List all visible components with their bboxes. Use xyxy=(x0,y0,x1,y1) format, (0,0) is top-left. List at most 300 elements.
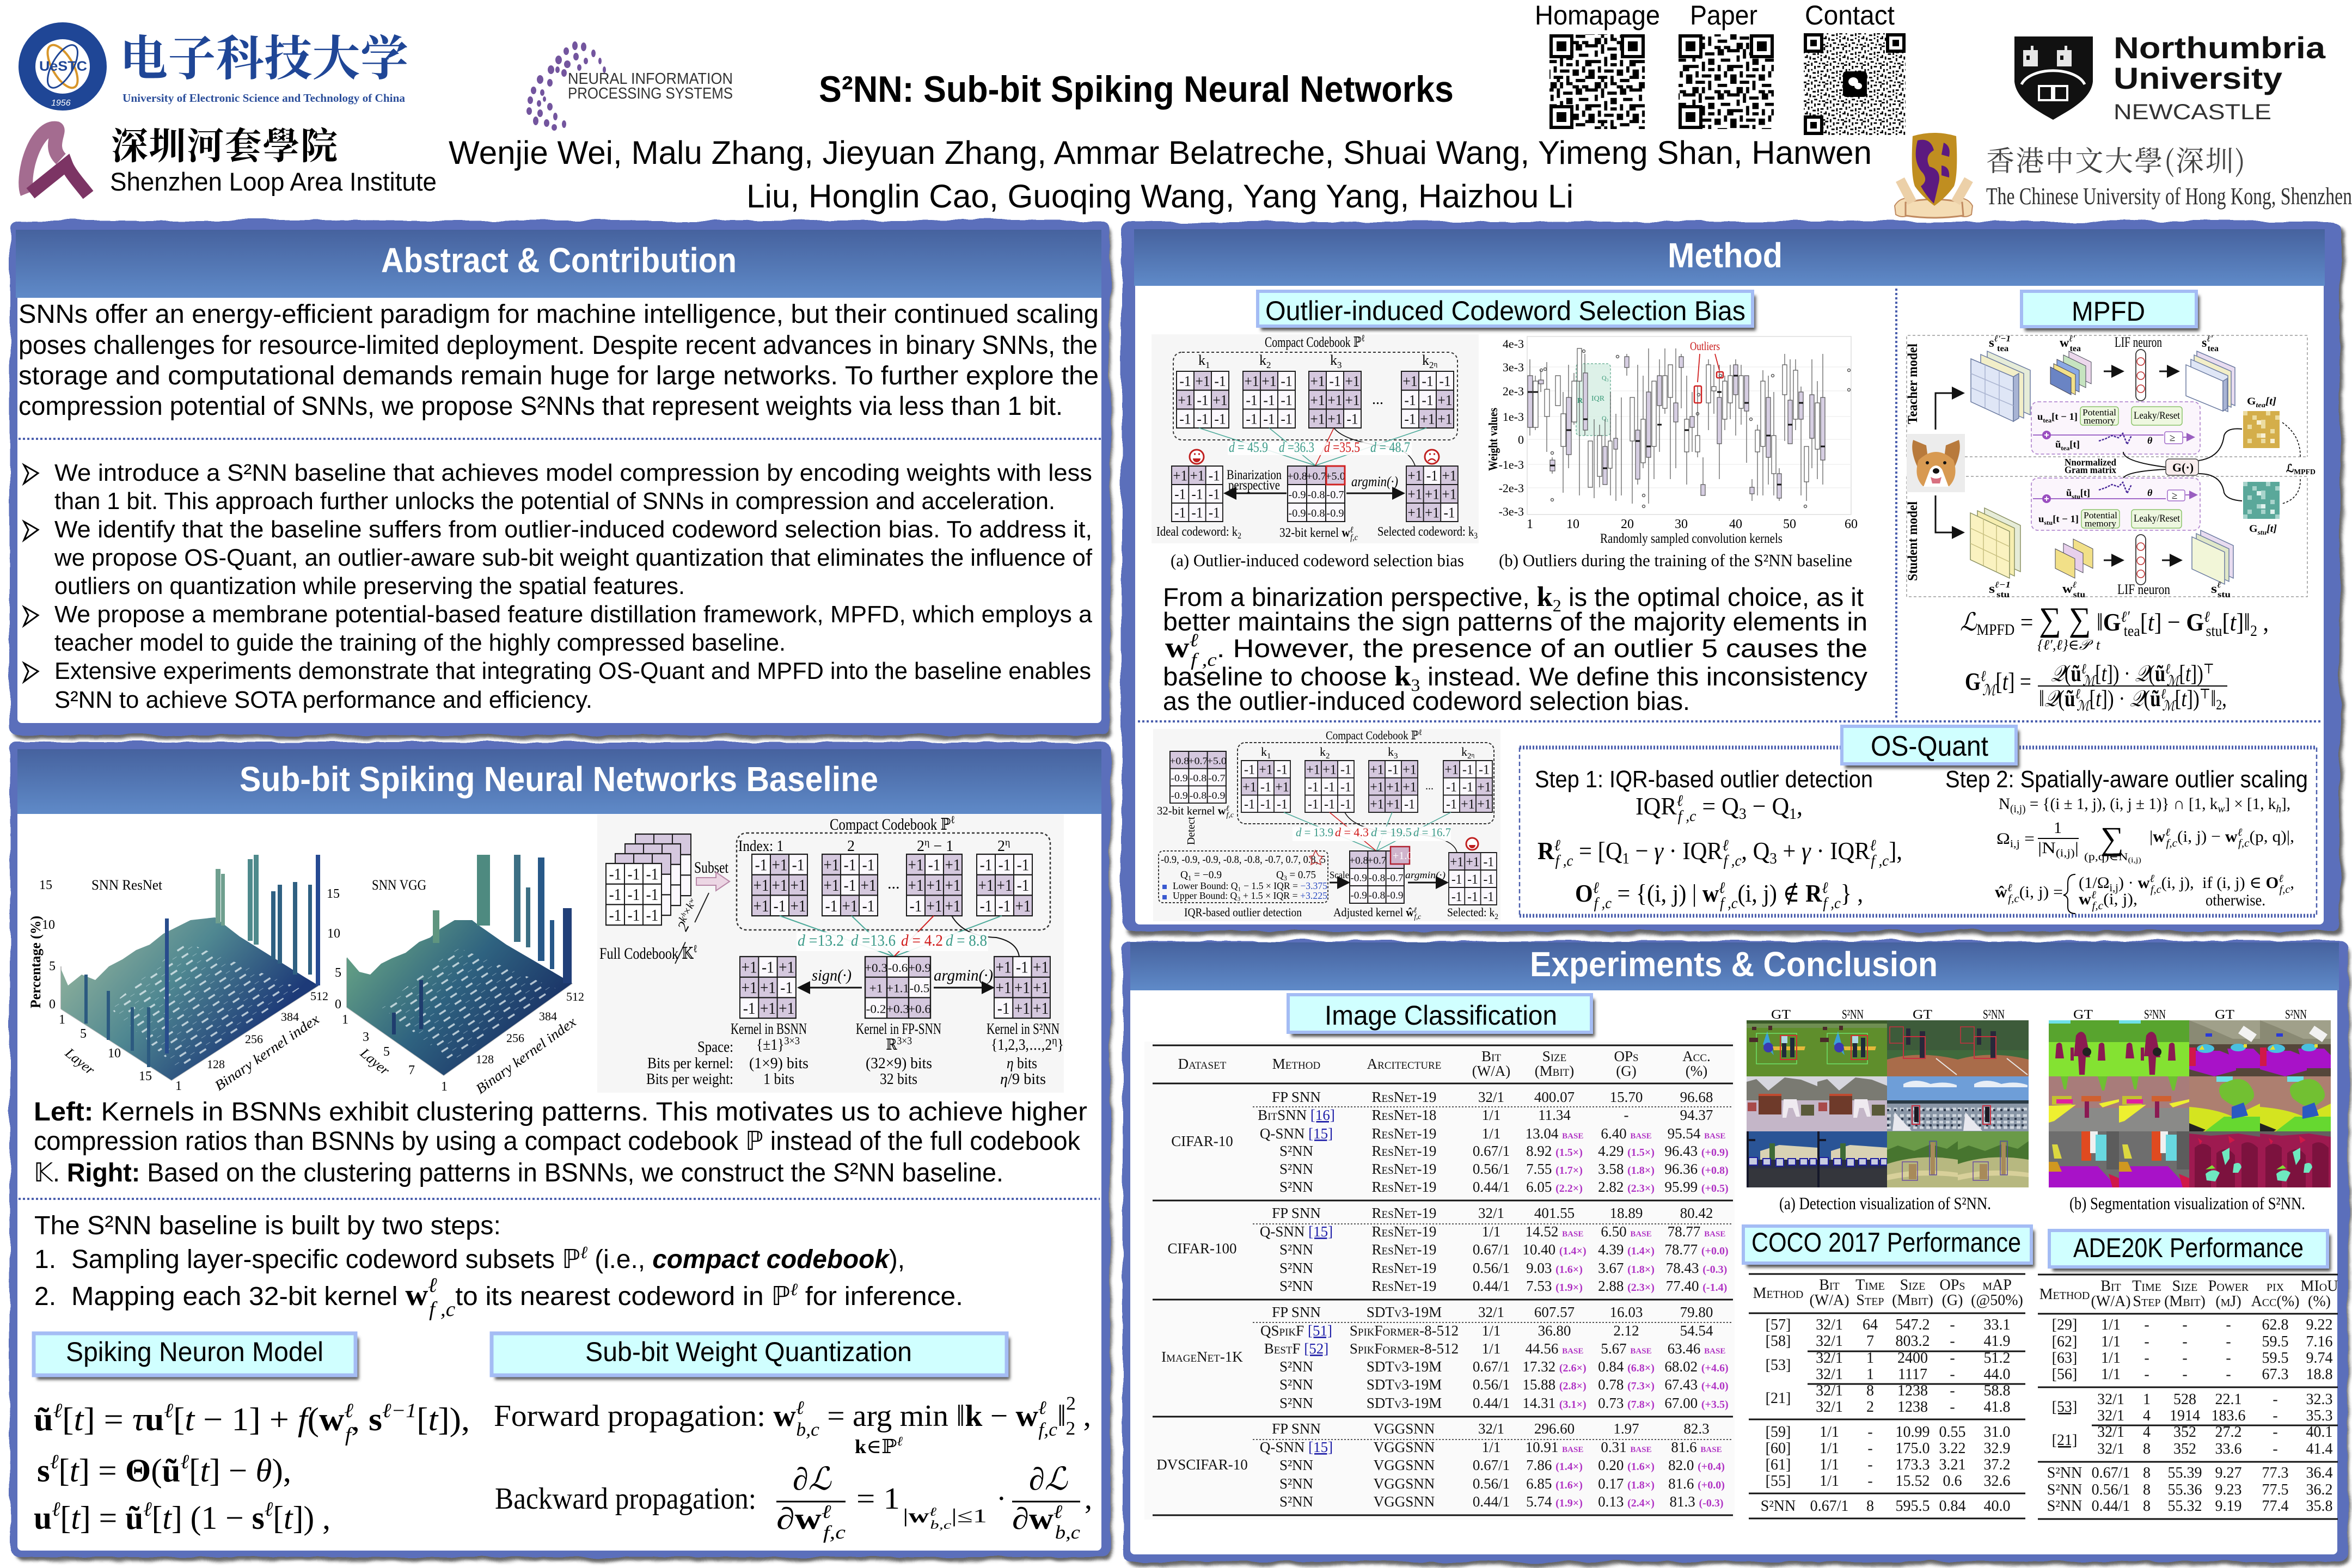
figure: OS-Quant pipeline: -0.9 xyxy=(1208,791,1225,801)
figure a: codeword selection bias: argmin(·) xyxy=(1351,474,1398,489)
QR: paper: Paper xyxy=(1690,0,1757,30)
table: ADE20K: Size xyxy=(2172,1278,2197,1295)
compact codebook box: -1 xyxy=(755,856,767,874)
chart: outliers boxplot: 0 xyxy=(1518,433,1524,446)
figure a: codeword selection bias: k xyxy=(1259,352,1266,368)
figure a: codeword selection bias: +1 xyxy=(1407,468,1422,484)
table: image classification results: 7.53 (1.9×) xyxy=(1526,1278,1583,1294)
figure a: codeword selection bias: d = 45.9 xyxy=(1229,439,1268,455)
QR: paper xyxy=(1679,0,1774,129)
table: ADE20K: Acc(%) xyxy=(2251,1293,2299,1310)
table: ADE20K: 8 xyxy=(2143,1465,2151,1481)
equations: spiking neuron model: [ xyxy=(273,1500,284,1536)
step 2: , xyxy=(2290,874,2294,892)
text block: two steps: ℓ xyxy=(790,1279,798,1299)
icon: happy face xyxy=(1190,450,1204,464)
equations: spiking neuron model: t] = Θ(ũ xyxy=(70,1453,180,1489)
table: COCO 2017: 44.0 xyxy=(1984,1366,2010,1383)
figure: OS-Quant pipeline: -1 xyxy=(1260,797,1271,812)
equations: sub-bit quantization: k∈ℙ xyxy=(855,1436,896,1457)
kernels comparison: {±1} xyxy=(756,1037,787,1054)
table: COCO 2017: 595.5 xyxy=(1896,1498,1930,1515)
table: COCO 2017: 175.0 xyxy=(1896,1440,1930,1457)
text block: contribution bullets: than 1 bit. This approach further unlocks the potential of SNNs in compression and acceleration. xyxy=(54,488,1055,514)
table: COCO 2017: 0.55 xyxy=(1939,1424,1965,1441)
equations: MPFD loss: 2 xyxy=(2250,623,2257,640)
equations: spiking neuron model: u xyxy=(34,1500,52,1536)
chart: outliers boxplot xyxy=(1486,336,1858,546)
chart: SNN ResNet 3D: 5 xyxy=(80,1027,87,1041)
table: COCO 2017: 32.6 xyxy=(1984,1473,2010,1490)
figure a: codeword selection bias: -1 xyxy=(1174,486,1186,503)
compact codebook box: -1 xyxy=(862,897,874,915)
table: image classification results: DVSCIFAR-10 xyxy=(1156,1456,1248,1473)
table: image classification results: ResNet-19 xyxy=(1372,1143,1436,1159)
captions: figures a and b: (a) Outlier-induced codeword selection bias xyxy=(1171,550,1464,570)
equations: spiking neuron model: ℓ xyxy=(50,1451,59,1473)
table: image classification results: ResNet-19 xyxy=(1372,1125,1436,1142)
diagram: MPFD framework: tea xyxy=(2070,344,2081,353)
chart: SNN ResNet 3D: 10 xyxy=(42,918,55,932)
equations: MPFD loss: t]) · 𝒬(ũ xyxy=(2102,661,2167,687)
figure: OS-Quant pipeline: -0.9 xyxy=(1350,890,1367,902)
step 1: f ,c xyxy=(1823,895,1841,912)
table: ADE20K: 32/1 xyxy=(2097,1391,2124,1408)
table: image classification results: ImageNet-1K xyxy=(1161,1349,1243,1365)
kernels comparison: 1 bits xyxy=(763,1071,794,1088)
chart: SNN ResNet 3D: 0 xyxy=(49,997,56,1012)
step 1: , xyxy=(1797,792,1803,820)
figure a: codeword selection bias: k xyxy=(1198,352,1205,368)
figure a: codeword selection bias: Binarization xyxy=(1227,468,1282,482)
table: ADE20K: 0.67/1 xyxy=(2092,1465,2130,1481)
kernels comparison: -1 xyxy=(1016,958,1028,977)
table: ADE20K: 9.22 xyxy=(2306,1316,2332,1333)
chart: SNN ResNet 3D: 128 xyxy=(207,1057,225,1071)
chart: outliers boxplot: -3e-3 xyxy=(1499,505,1524,518)
kernels comparison: ℝ xyxy=(886,1037,898,1054)
compact codebook box: +1 xyxy=(945,897,960,915)
text block: two steps: Sampling layer-specific codeword subsets ℙ xyxy=(71,1245,584,1274)
figure a: codeword selection bias: +1 xyxy=(1425,505,1440,521)
compact codebook box: -1 xyxy=(825,897,837,915)
equations: MPFD loss: ℳ xyxy=(2082,673,2097,689)
figure: OS-Quant pipeline: argmin(·) xyxy=(1405,869,1445,881)
callout: Image Classification: Image Classification xyxy=(1325,1000,1557,1031)
compact codebook box: ... xyxy=(887,874,899,892)
table: ADE20K xyxy=(2038,1275,2338,1519)
table: image classification results: BestF [52] xyxy=(1264,1340,1328,1357)
table: image classification results: 54.54 xyxy=(1680,1322,1713,1339)
equations: sub-bit quantization: f,c xyxy=(1038,1419,1058,1440)
compact codebook box: -1 xyxy=(910,897,922,915)
equations: spiking neuron model: [ xyxy=(152,1500,162,1536)
figure a: codeword selection bias: +1 xyxy=(1173,468,1187,484)
figure: OS-Quant pipeline: f,c xyxy=(1227,811,1234,819)
equations: MPFD loss: MPFD xyxy=(1976,622,2014,639)
diagram: MPFD framework: stu xyxy=(2073,590,2085,599)
table: image classification results: 14.52 BASE xyxy=(1526,1223,1583,1240)
table: image classification results: FP SNN xyxy=(1272,1205,1321,1221)
figure: OS-Quant pipeline: = −0.9 xyxy=(1191,869,1222,881)
kernels comparison: η bits xyxy=(1007,1055,1037,1072)
equations: MPFD loss: ℓ xyxy=(2204,609,2210,626)
student membrane block: Leaky/Reset xyxy=(2134,513,2180,524)
teacher membrane block: Potential xyxy=(2082,407,2116,418)
table: image classification results: 63.46 BASE xyxy=(1668,1340,1725,1357)
table: image classification results: S²NN xyxy=(1279,1475,1313,1492)
table: COCO 2017: [53] xyxy=(1766,1357,1791,1374)
distances: d =13.6 xyxy=(851,932,896,950)
figure a: codeword selection bias: +1 xyxy=(1178,391,1193,408)
callout: OS-Quant xyxy=(1842,726,2019,768)
table: COCO 2017: mAP xyxy=(1982,1277,2012,1294)
chart: SNN VGG 3D: 5 xyxy=(335,966,341,980)
teacher membrane block: [t] xyxy=(2069,439,2080,450)
table: image classification results: 95.99 (+0.5) xyxy=(1664,1179,1729,1195)
chart: SNN VGG 3D: 10 xyxy=(327,927,340,941)
table: ADE20K: 55.32 xyxy=(2168,1498,2202,1515)
table: image classification results: Q-SNN [15] xyxy=(1260,1223,1333,1240)
text block: contribution bullets: we propose OS-Quant, an outlier-aware sub-bit weight quantization that eliminates the influence of xyxy=(54,544,1093,571)
equations: MPFD loss: ℓ xyxy=(1981,668,1986,685)
table: COCO 2017: 3.21 xyxy=(1939,1456,1965,1473)
teacher membrane block: memory xyxy=(2084,415,2116,426)
compact codebook box: +1 xyxy=(791,877,806,895)
table: COCO 2017: Step xyxy=(1856,1292,1884,1309)
teacher membrane block xyxy=(2031,402,2200,454)
figure: OS-Quant pipeline: -1 xyxy=(1467,872,1478,887)
table: COCO 2017: 32/1 xyxy=(1816,1366,1843,1383)
table: COCO 2017: 40.0 xyxy=(1984,1498,2010,1515)
logo: Northumbria University: University xyxy=(2114,61,2282,95)
diagram: MPFD framework: s xyxy=(1989,582,1994,596)
equations: MPFD loss: 𝒬(ũ xyxy=(2051,661,2084,687)
table: ADE20K: S²NN xyxy=(2047,1481,2082,1498)
full codebook stack: -1 xyxy=(646,865,658,884)
table: COCO 2017: 0.6 xyxy=(1943,1473,1962,1490)
figure: OS-Quant pipeline: +1 xyxy=(1259,762,1273,777)
table: ADE20K: 59.5 xyxy=(2262,1350,2289,1367)
figure: OS-Quant pipeline: +1 xyxy=(1477,780,1491,795)
figure: OS-Quant pipeline: +1 xyxy=(1242,780,1257,795)
diagram: MPFD framework: LIF neuron xyxy=(2115,334,2162,350)
table: COCO 2017: 32/1 xyxy=(1816,1316,1843,1333)
table: image classification results: 77.40 (-1.4) xyxy=(1666,1278,1727,1294)
logo: CUHK Shenzhen: 香港中文大學(深圳) xyxy=(1986,138,2245,179)
table: ADE20K: 77.4 xyxy=(2262,1498,2289,1515)
equations: sub-bit quantization: 2 xyxy=(1065,1418,1075,1439)
figure: OS-Quant pipeline: +5.0 xyxy=(1207,756,1227,767)
logo: NeurIPS xyxy=(526,41,733,131)
step 1: } , xyxy=(1841,879,1863,907)
table: image classification results: 7.55 (1.7×) xyxy=(1526,1161,1583,1177)
compact codebook box: +1 xyxy=(1015,897,1031,915)
table: ADE20K: 4 xyxy=(2143,1407,2151,1424)
chart: outliers boxplot: -1e-3 xyxy=(1499,458,1524,471)
table: image classification results: 5.74 (1.9×) xyxy=(1526,1493,1583,1510)
diagram: MPFD framework: tea xyxy=(2208,344,2219,353)
equations: MPFD loss: [ xyxy=(1995,667,2002,695)
chart: SNN VGG 3D: 256 xyxy=(506,1031,524,1045)
chart: SNN ResNet 3D: Percentage (%) xyxy=(28,916,44,1008)
table: COCO 2017: [59] xyxy=(1766,1424,1791,1441)
figure: OS-Quant pipeline: +1 xyxy=(1275,780,1289,795)
table: image classification results: 0.56/1 xyxy=(1473,1475,1510,1492)
equations: MPFD loss: 2 xyxy=(2216,697,2222,713)
table: COCO 2017: 547.2 xyxy=(1896,1316,1930,1333)
step 2: (i, j), xyxy=(2103,890,2137,908)
step 2: | xyxy=(2075,839,2079,857)
figure a: codeword selection bias: +1 xyxy=(1437,411,1453,427)
table: image classification results: Bit xyxy=(1481,1048,1501,1064)
step 2: (i,j) xyxy=(2010,803,2026,815)
equations: sub-bit quantization: 2 xyxy=(1066,1393,1076,1414)
authors xyxy=(449,134,1872,215)
figure: OS-Quant pipeline: 3 xyxy=(1394,752,1398,761)
text block: two steps: 2. xyxy=(34,1282,56,1311)
equations: spiking neuron model: s xyxy=(37,1453,50,1489)
equations: spiking neuron model: ℓ xyxy=(180,1451,189,1473)
compact codebook box: -1 xyxy=(1017,877,1029,895)
figure a: codeword selection bias: -1 xyxy=(1443,505,1455,521)
step 2: ℓ xyxy=(2238,826,2243,838)
table: COCO 2017: Size xyxy=(1900,1277,1925,1294)
step 1: 3 xyxy=(1769,850,1777,867)
text block: contribution bullets: We propose a membrane potential-based feature distillation framework, MPFD, which employs a xyxy=(54,601,1093,628)
table: image classification results: 32/1 xyxy=(1478,1205,1504,1221)
text block: bias explanation: instead. We define this inconsistency xyxy=(1420,662,1868,691)
text block: two steps: The S²NN baseline is built by two steps: xyxy=(34,1211,501,1240)
figure: OS-Quant pipeline: +1 xyxy=(1386,797,1400,812)
chart: SNN ResNet 3D: 10 xyxy=(108,1046,121,1061)
table: ADE20K: - xyxy=(2273,1391,2278,1408)
equations: spiking neuron model: [ xyxy=(60,1500,71,1536)
table: ADE20K: 55.36 xyxy=(2168,1481,2202,1498)
table: ADE20K: - xyxy=(2182,1333,2188,1350)
chart: SNN ResNet 3D: 384 xyxy=(281,1010,299,1024)
figure a: codeword selection bias: -1 xyxy=(1179,411,1191,427)
chart: outliers boxplot: 3e-3 xyxy=(1503,360,1524,374)
table: image classification results: 10.91 BASE xyxy=(1526,1439,1583,1455)
student kernels xyxy=(2055,539,2093,578)
step 1: 1 xyxy=(1622,850,1630,867)
step 2: w xyxy=(2079,890,2091,908)
compact codebook box: +1 xyxy=(945,856,960,874)
figure: OS-Quant pipeline: Q xyxy=(1180,869,1188,881)
teacher membrane block: θ xyxy=(2147,435,2153,446)
table: COCO 2017: 3.22 xyxy=(1939,1440,1965,1457)
table: image classification results: 95.54 BASE xyxy=(1668,1125,1725,1142)
heading: abstract xyxy=(16,230,1101,298)
diagram: MPFD framework: ℓ xyxy=(2216,580,2221,590)
figure: OS-Quant pipeline: -1 xyxy=(1451,889,1462,904)
table: image classification results: 17.32 (2.6×) xyxy=(1522,1358,1587,1375)
figure: OS-Quant pipeline: -1 xyxy=(1483,889,1494,904)
figure a: codeword selection bias: -1 xyxy=(1439,372,1451,389)
table: ADE20K: [56] xyxy=(2052,1366,2077,1383)
chart: SNN VGG 3D: 15 xyxy=(327,887,340,901)
heatmap: student Gram: G xyxy=(2249,523,2257,535)
table: ADE20K: - xyxy=(2182,1316,2188,1333)
table: image classification results: 0.44/1 xyxy=(1473,1179,1510,1195)
text block: bias explanation: w xyxy=(1165,631,1190,664)
step 1: R xyxy=(1805,879,1822,907)
step 2: ℓ xyxy=(2149,873,2155,885)
table: COCO 2017: - xyxy=(1867,1456,1873,1473)
table: image classification results: 4.39 (1.4×) xyxy=(1598,1241,1655,1258)
table: ADE20K: Step xyxy=(2133,1293,2161,1310)
full codebook stack: -1 xyxy=(609,906,621,924)
figure a: codeword selection bias: -1 xyxy=(1209,505,1220,521)
figure: OS-Quant pipeline: +1 xyxy=(1386,780,1400,795)
callout: COCO 2017 Performance: COCO 2017 Performance xyxy=(1751,1227,2021,1258)
equations: spiking neuron model: [ xyxy=(189,1453,200,1489)
step 2: ], xyxy=(2281,795,2290,813)
step 2: |N xyxy=(2038,839,2053,857)
full codebook stack: -1 xyxy=(646,906,658,924)
table: COCO 2017: 33.1 xyxy=(1984,1316,2010,1333)
equations: spiking neuron model: f xyxy=(345,1424,354,1446)
table: image classification results: S²NN xyxy=(1279,1278,1313,1294)
chart: SNN VGG 3D: 384 xyxy=(539,1009,557,1023)
logo: UESTC xyxy=(19,22,408,111)
figure a: codeword selection bias: -1 xyxy=(1214,372,1226,389)
kernels comparison: +0.6 xyxy=(908,1002,931,1015)
kernels comparison: sign(·) xyxy=(812,966,852,984)
figure: OS-Quant pipeline: = 0.75 xyxy=(1287,869,1316,881)
table: image classification results: 8.92 (1.5×) xyxy=(1526,1143,1583,1159)
heatmap: student Gram xyxy=(2243,482,2280,536)
teacher membrane block: ũ xyxy=(2055,439,2061,450)
step 1: + xyxy=(1777,837,1802,865)
table: image classification results: VGGSNN xyxy=(1374,1457,1435,1473)
figure: OS-Quant pipeline: +0.7 xyxy=(1367,855,1386,867)
table: COCO 2017: 2 xyxy=(1866,1399,1874,1416)
figure a: codeword selection bias: +1 xyxy=(1420,411,1435,427)
table: image classification results: ResNet-19 xyxy=(1372,1161,1436,1177)
equations: MPFD loss: ℓ xyxy=(2165,661,2170,677)
step 2: O xyxy=(2266,874,2278,892)
chart: outliers boxplot: 30 xyxy=(1675,517,1688,531)
figure a: codeword selection bias: +0.7 xyxy=(1306,470,1326,482)
kernels comparison: +1 xyxy=(779,1000,794,1018)
figure: OS-Quant pipeline: d = 19.5 xyxy=(1371,825,1412,839)
highlight: IQR annotation: R xyxy=(1577,397,1583,405)
equations: sub-bit quantization: Backward propagation: xyxy=(495,1482,756,1516)
figure: OS-Quant pipeline xyxy=(1153,728,1500,921)
table: image classification results: 0.67/1 xyxy=(1473,1241,1510,1258)
table: ADE20K: 77.5 xyxy=(2262,1481,2289,1498)
compact codebook box: Compact Codebook ℙ xyxy=(830,816,976,834)
kernels comparison: +1 xyxy=(760,1000,776,1018)
table: COCO 2017: 2400 xyxy=(1897,1350,1928,1367)
table: image classification results: 0.17 (1.8×) xyxy=(1598,1475,1655,1492)
chart: SNN ResNet 3D: 15 xyxy=(39,878,52,892)
text block: left/right explanation xyxy=(34,1098,1087,1187)
table: image classification results: 1/1 xyxy=(1482,1322,1500,1339)
step 2: f,c xyxy=(2151,884,2161,896)
figure: OS-Quant pipeline: d = 13.9 xyxy=(1296,825,1333,839)
diagram: MPFD framework: ℓ−1 xyxy=(1994,580,2011,590)
figure a: codeword selection bias: Selected codeword: k xyxy=(1377,525,1490,539)
table: image classification results: 1/1 xyxy=(1482,1107,1500,1123)
chart: SNN VGG 3D: 1 xyxy=(441,1080,448,1094)
step 1: f ,c xyxy=(1678,807,1696,825)
figure a: codeword selection bias: -0.9 xyxy=(1326,507,1344,519)
figure a: codeword selection bias: +1 xyxy=(1437,391,1453,408)
table: image classification results: S²NN xyxy=(1279,1358,1313,1375)
step 1: = [Q xyxy=(1573,837,1622,865)
figure a: codeword selection bias: d = 48.7 xyxy=(1370,439,1410,455)
figure a: codeword selection bias: +1 xyxy=(1407,505,1422,521)
figure a: codeword selection bias: d =36.3 xyxy=(1279,439,1314,455)
equations: spiking neuron model: t] = τu xyxy=(74,1401,163,1437)
kernels comparison: +0.9 xyxy=(908,961,931,975)
step 1: , Q xyxy=(1741,837,1769,865)
figure a: codeword selection bias: k xyxy=(1422,352,1429,368)
table: image classification results: 16.03 xyxy=(1610,1304,1643,1320)
text block: abstract paragraph xyxy=(19,300,1099,421)
text block: contribution bullets: S²NN to achieve SOTA performance and efficiency. xyxy=(54,687,592,713)
step 2: (i, j), if (i, j) ∈ xyxy=(2161,874,2266,892)
table: ADE20K: 9.23 xyxy=(2215,1481,2242,1498)
table: ADE20K: - xyxy=(2226,1316,2231,1333)
table: COCO 2017: 1/1 xyxy=(1820,1473,1839,1490)
compact codebook box: -1 xyxy=(980,856,992,874)
table: image classification results: 78.77 BASE xyxy=(1668,1223,1725,1240)
text block: left/right explanation: 𝕂. Right: Based on the clustering patterns in BSNNs, we construct the S²NN baseline. xyxy=(34,1159,1003,1187)
equations: spiking neuron model: [ xyxy=(416,1401,428,1437)
step 2: ) · xyxy=(2118,874,2137,892)
table: ADE20K: 1/1 xyxy=(2101,1366,2121,1383)
diagram: MPFD framework: w xyxy=(2060,336,2069,350)
figure a: codeword selection bias: +1 xyxy=(1244,372,1259,389)
figure a: codeword selection bias: -1 xyxy=(1426,468,1438,484)
table: ADE20K: 1914 xyxy=(2170,1407,2200,1424)
figure: OS-Quant pipeline: +1 xyxy=(1370,780,1384,795)
figure a: codeword selection bias: -1 xyxy=(1263,391,1275,408)
table: ADE20K: - xyxy=(2182,1350,2188,1367)
table: image classification results: SpikFormer-8-512 xyxy=(1350,1322,1459,1339)
figure a: codeword selection bias: 3 xyxy=(1474,531,1478,541)
equations: MPFD loss: {ℓ′,ℓ}∈𝒫 xyxy=(2037,637,2094,653)
table: image classification results xyxy=(1144,1042,1735,1520)
kernels comparison: +0.3 xyxy=(865,961,887,975)
figure: OS-Quant pipeline: ℓ xyxy=(1226,805,1229,813)
table: COCO 2017: [58] xyxy=(1766,1333,1791,1350)
table: image classification results: Method xyxy=(1272,1056,1320,1072)
table: image classification results: 13.04 BASE xyxy=(1526,1125,1583,1142)
table: image classification results: 0.44/1 xyxy=(1473,1278,1510,1294)
table: image classification results: ResNet-19 xyxy=(1372,1223,1436,1240)
table: COCO 2017: [21] xyxy=(1766,1390,1791,1407)
table: COCO 2017: 1/1 xyxy=(1820,1424,1839,1441)
text block: bias explanation: baseline to choose k xyxy=(1163,661,1410,692)
full codebook stack: -1 xyxy=(646,886,658,904)
diagram: MPFD framework: MPFD xyxy=(2294,468,2316,476)
compact codebook box: -1 xyxy=(1017,856,1029,874)
text block: bias explanation: as the outlier-induced codeword selection bias. xyxy=(1163,687,1690,715)
figure: OS-Quant pipeline: -0.7 xyxy=(1387,873,1404,884)
step 1: R xyxy=(1538,837,1554,865)
figure a: codeword selection bias: +1 xyxy=(1442,468,1456,484)
step 1: ℓ xyxy=(1822,879,1828,897)
table: COCO 2017: 32/1 xyxy=(1816,1350,1843,1367)
table: image classification results: 96.36 (+0.8) xyxy=(1664,1161,1729,1177)
LIF neuron student xyxy=(2136,535,2146,585)
text block: abstract paragraph: storage and computational demands remain huge for large networks. To further explore the xyxy=(19,362,1099,390)
